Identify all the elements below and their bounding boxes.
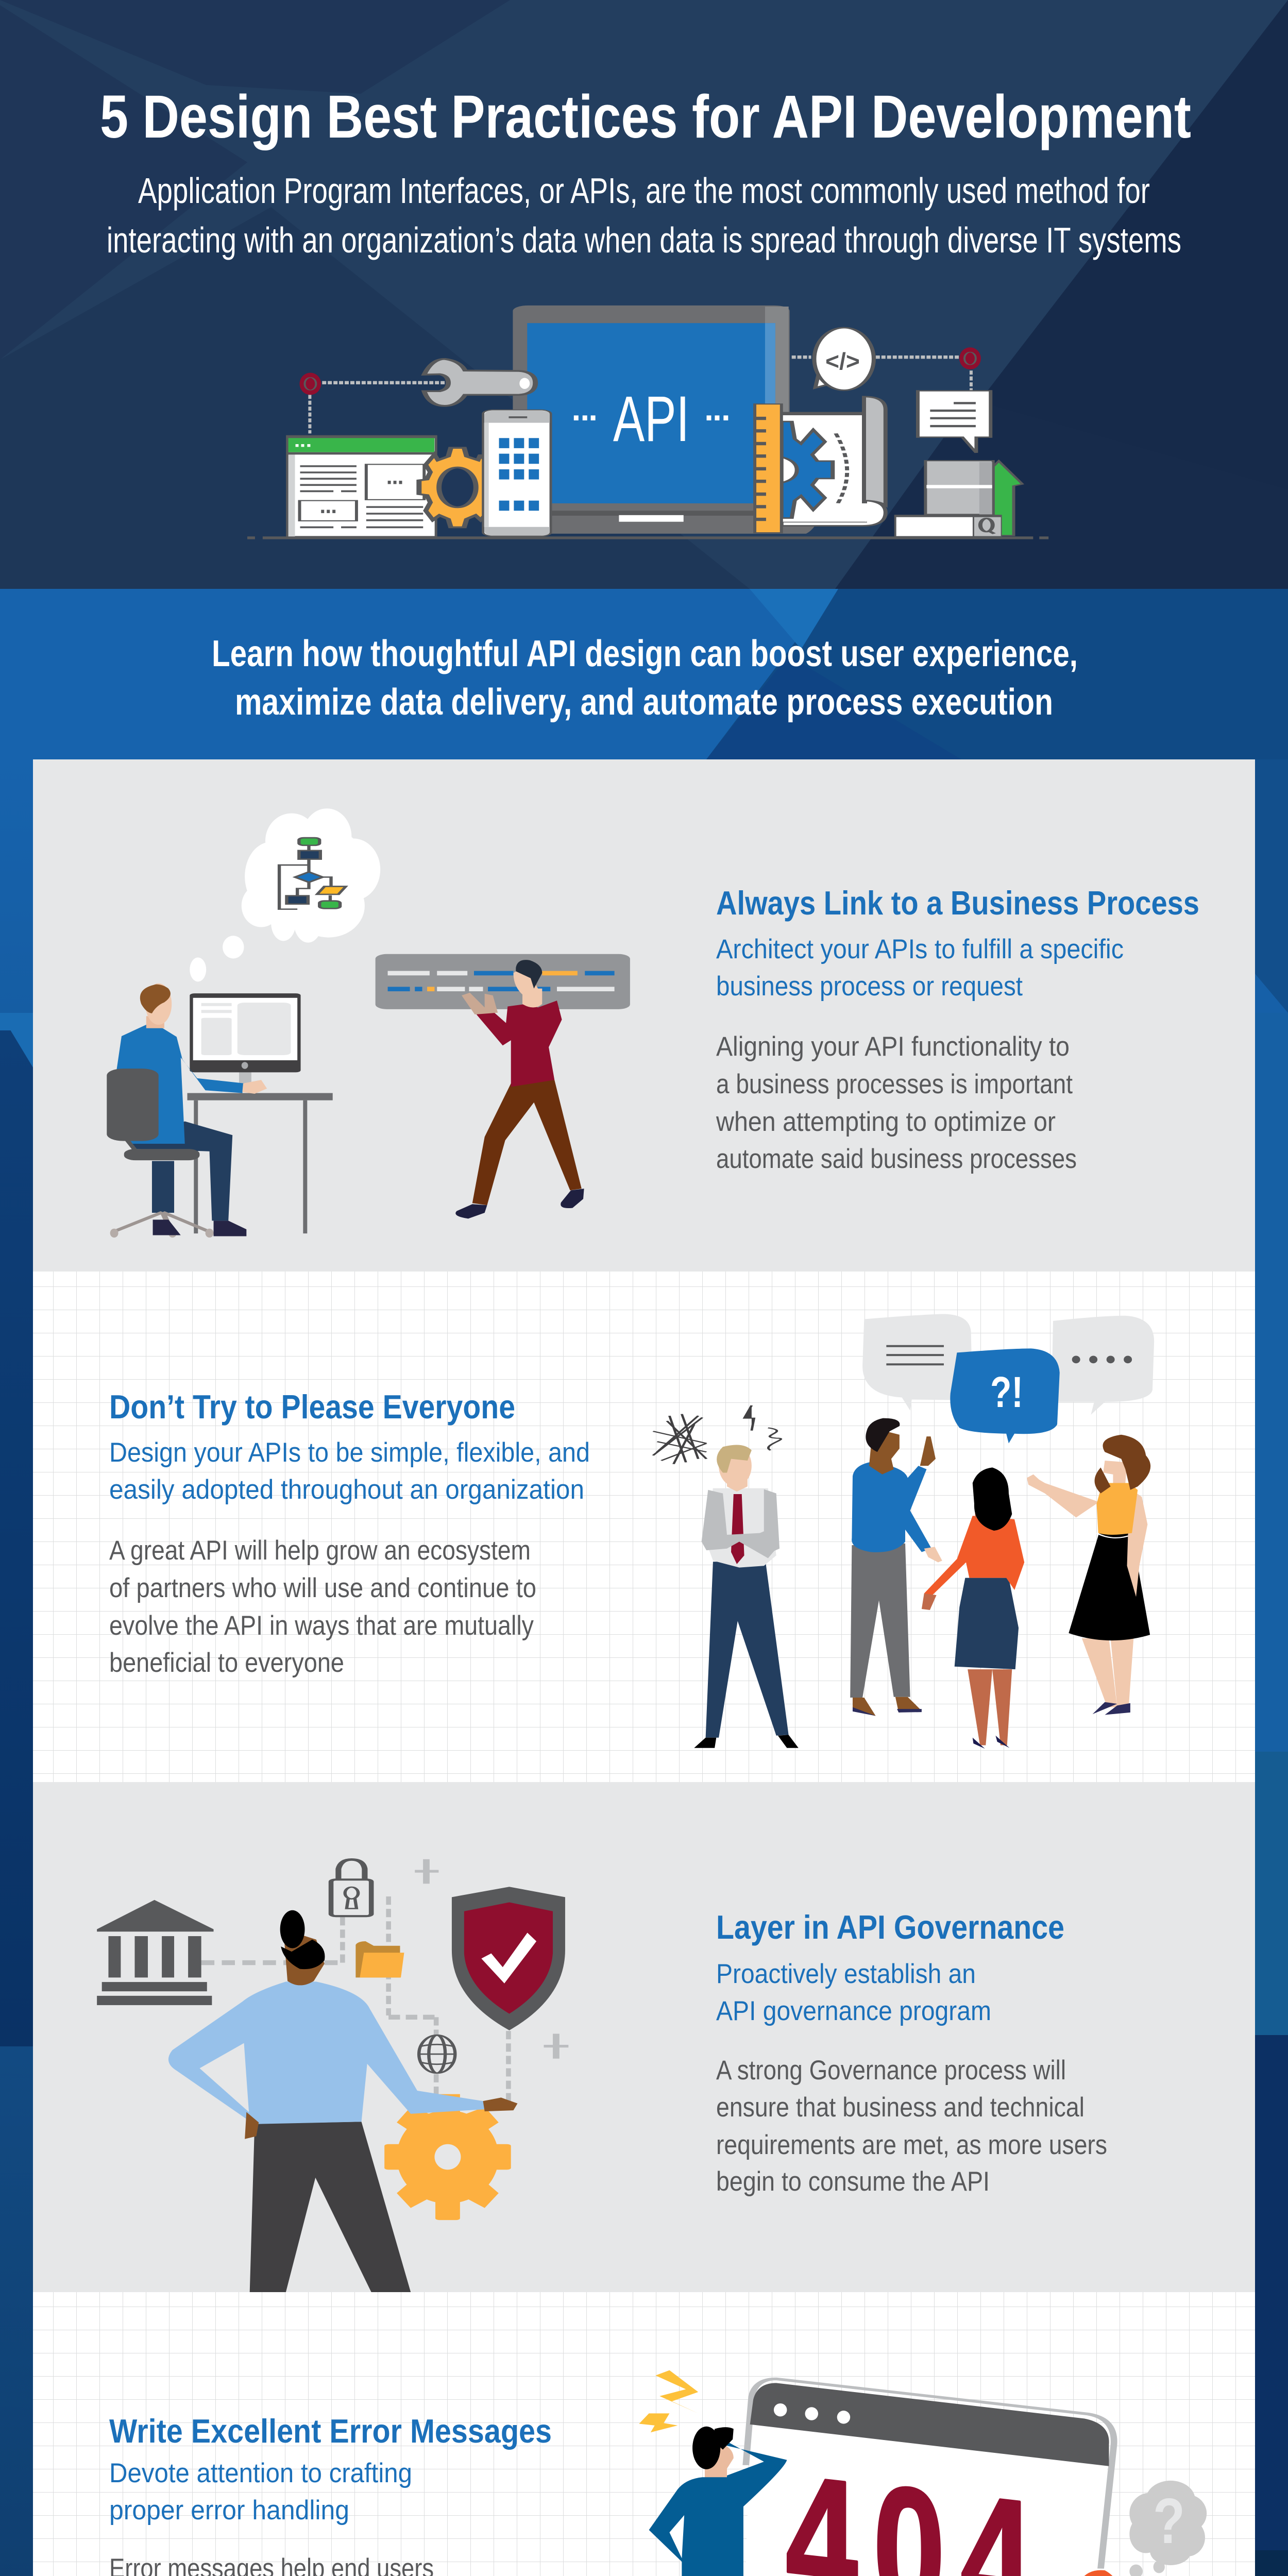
desk — [188, 1093, 333, 1233]
heading: Don’t Try to Please Everyone — [109, 1388, 515, 1426]
icon: padlock — [331, 1859, 371, 1916]
background: blue band and side strips — [0, 589, 1288, 2576]
icon: ruler — [755, 404, 782, 533]
icon: blueprint with blue gear — [782, 397, 886, 526]
body text: a business processes is important — [716, 1069, 1073, 1099]
subheading: proper error handling — [109, 2495, 349, 2526]
lead-in heading: Learn how thoughtful API design can boost user experience, — [212, 633, 1078, 674]
icon: question thought cloud — [1129, 2481, 1207, 2576]
label: code tag: </> — [825, 348, 860, 375]
body text — [716, 2055, 1107, 2197]
icon: code speech bubble and right target — [792, 328, 981, 390]
icon: security shield — [452, 1887, 565, 2030]
body text: ensure that business and technical — [716, 2092, 1084, 2123]
panel: write excellent error messages — [33, 2292, 1255, 2576]
background: header dark navy — [0, 0, 1288, 589]
lead-in heading — [212, 633, 1078, 723]
label: question mark: ? — [1153, 2486, 1185, 2557]
laptop — [513, 306, 822, 534]
panel: always link to a business process — [33, 759, 1255, 1272]
illustration: man at desk with thought cloud, man at board — [107, 808, 630, 1238]
body text: A great API will help grow an ecosystem — [109, 1535, 531, 1566]
process board — [376, 954, 630, 1009]
icon: search bar — [894, 515, 1002, 536]
figure: standing man — [455, 960, 584, 1218]
monitor — [190, 993, 301, 1092]
subheading — [716, 934, 1124, 1002]
browser window — [743, 2379, 1114, 2576]
body text: beneficial to everyone — [109, 1648, 344, 1678]
body text: begin to consume the API — [716, 2166, 990, 2197]
illustration: four people discussing — [653, 1314, 1154, 1749]
icon: left target and connector — [299, 373, 446, 433]
body text: requirements are met, as more users — [716, 2130, 1107, 2160]
icon: frustration scribble — [653, 1405, 781, 1464]
body text: when attempting to optimize or — [716, 1107, 1056, 1137]
body text: automate said business processes — [716, 1144, 1077, 1174]
subheading: business process or request — [716, 971, 1023, 1002]
heading: Layer in API Governance — [716, 1908, 1064, 1946]
dashed connectors — [201, 1896, 509, 2102]
subheading — [109, 2458, 412, 2526]
figure: seated woman and desk — [1023, 2570, 1206, 2576]
subheading: Proactively establish an — [716, 1959, 976, 1989]
figure: puzzled man — [649, 2427, 787, 2576]
icon: chat note — [918, 391, 991, 453]
speech bubbles — [862, 1314, 1154, 1444]
body text — [109, 1535, 536, 1678]
icon: browser window — [287, 436, 436, 536]
figure: man with gear — [168, 1910, 517, 2292]
subheading — [109, 1437, 590, 1505]
icon: orange gear — [384, 2094, 511, 2220]
figure: man with crossed arms — [694, 1445, 799, 1748]
body text: Aligning your API functionality to — [716, 1031, 1070, 1062]
figure: woman in black skirt — [1027, 1435, 1150, 1715]
icon: thought cloud with flowchart — [190, 808, 380, 981]
illustration: 404 error scene — [639, 2370, 1207, 2576]
heading: Write Excellent Error Messages — [109, 2412, 552, 2450]
icon: server and growth arrow — [925, 461, 1022, 535]
figure: seated man — [107, 984, 267, 1238]
icon: folder — [355, 1941, 404, 1977]
body text: of partners who will use and continue to — [109, 1573, 536, 1603]
lead-in heading: maximize data delivery, and automate process execution — [235, 682, 1053, 723]
figure: man pointing — [850, 1418, 942, 1716]
label: API: API — [613, 383, 689, 455]
subheading: Architect your APIs to fulfill a specific — [716, 934, 1124, 964]
panel: layer in API governance — [33, 1782, 1255, 2292]
icon: plus signs — [415, 1859, 568, 2059]
subheading — [716, 1959, 991, 2026]
body text: A strong Governance process will — [716, 2055, 1066, 2086]
subheading: Design your APIs to be simple, flexible, and — [109, 1437, 590, 1468]
subheading: easily adopted throughout an organization — [109, 1475, 584, 1505]
illustration: governance man with icons — [97, 1859, 568, 2292]
icon: globe — [419, 2035, 455, 2073]
icon: wrench — [424, 359, 535, 406]
heading: Always Link to a Business Process — [716, 884, 1199, 922]
label: question exclamation: ?! — [990, 1368, 1023, 1416]
body text: evolve the API in ways that are mutually — [109, 1611, 534, 1641]
icon: bank — [97, 1900, 214, 2005]
figure: woman in orange top — [922, 1467, 1024, 1749]
subheading: Devote attention to crafting — [109, 2458, 412, 2488]
icon: lightning bolts — [639, 2370, 698, 2432]
panel: don't try to please everyone — [33, 1272, 1255, 1782]
subtitle — [107, 171, 1181, 260]
subheading: API governance program — [716, 1996, 991, 2026]
icon: phone — [483, 410, 551, 536]
icon: orange gear — [419, 448, 496, 527]
body text — [716, 1031, 1077, 1174]
illustration: API devices — [247, 306, 1048, 539]
